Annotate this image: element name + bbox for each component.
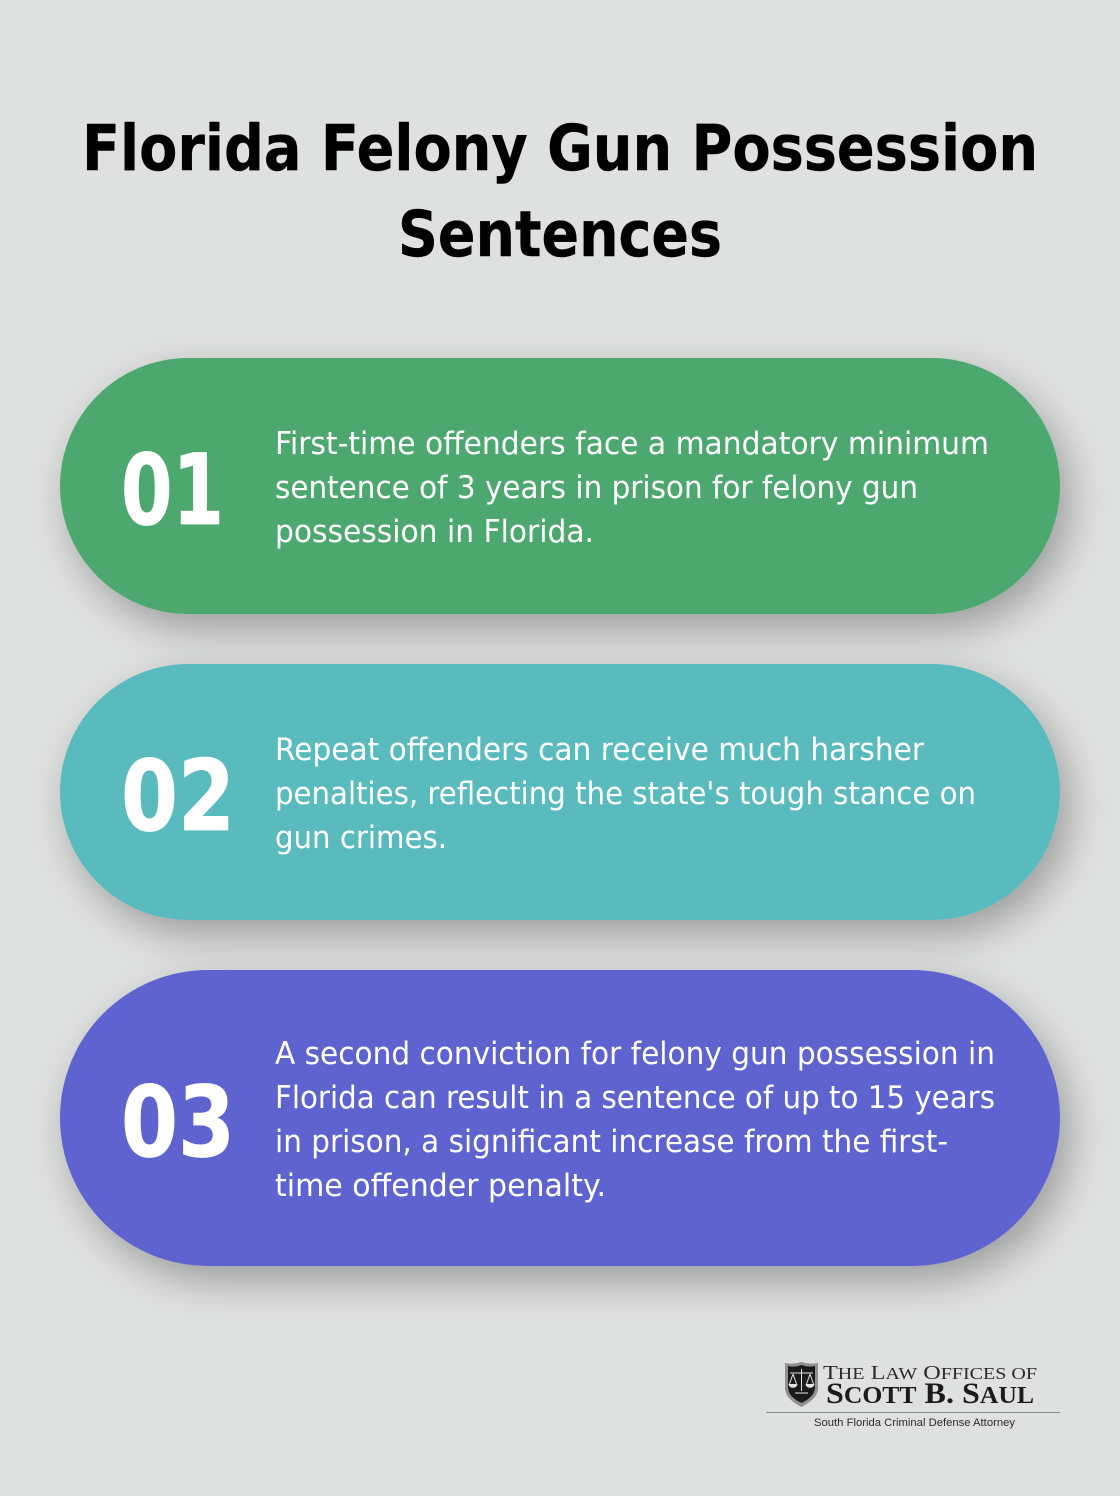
- icon: shield with scales: [785, 1362, 818, 1407]
- text block 01: [275, 426, 989, 550]
- number 03: 03: [121, 1066, 235, 1180]
- number 01: 01: [121, 434, 224, 548]
- card background 02: [60, 664, 1060, 920]
- text block 03: A second conviction for felony gun possession in: [275, 1036, 995, 1072]
- logo text: scott b. saul: SCOTT B. SAUL: [826, 1377, 1034, 1410]
- text block 03: Florida can result in a sentence of up to 15 years: [275, 1080, 995, 1116]
- text block 02: Repeat offenders can receive much harsher: [275, 732, 924, 768]
- card background 03: [60, 970, 1060, 1266]
- panel: step 01: [60, 358, 1060, 614]
- text block 03: [275, 1036, 995, 1204]
- text block 01: sentence of 3 years in prison for felony gun: [275, 470, 918, 506]
- text block 01: First-time offenders face a mandatory minimum: [275, 426, 989, 462]
- text block 02: penalties, reflecting the state's tough stance on: [275, 776, 976, 812]
- panel: step 02: [60, 664, 1060, 920]
- logo tagline: South Florida Criminal Defense Attorney: [814, 1417, 1016, 1429]
- number 02: 02: [121, 740, 235, 854]
- logo: [766, 1362, 1060, 1429]
- text block 02: gun crimes.: [275, 820, 447, 856]
- panel: step 03: [60, 970, 1060, 1266]
- text block 03: in prison, a significant increase from the first-: [275, 1124, 948, 1160]
- card background 01: [60, 358, 1060, 614]
- text block 03: time offender penalty.: [275, 1168, 606, 1204]
- text block 02: [275, 732, 976, 856]
- logo text: the law offices of: THE LAW O FFICES OF: [823, 1362, 1037, 1384]
- title: [82, 112, 1038, 271]
- title: Sentences: [398, 198, 722, 271]
- text block 01: possession in Florida.: [275, 514, 594, 550]
